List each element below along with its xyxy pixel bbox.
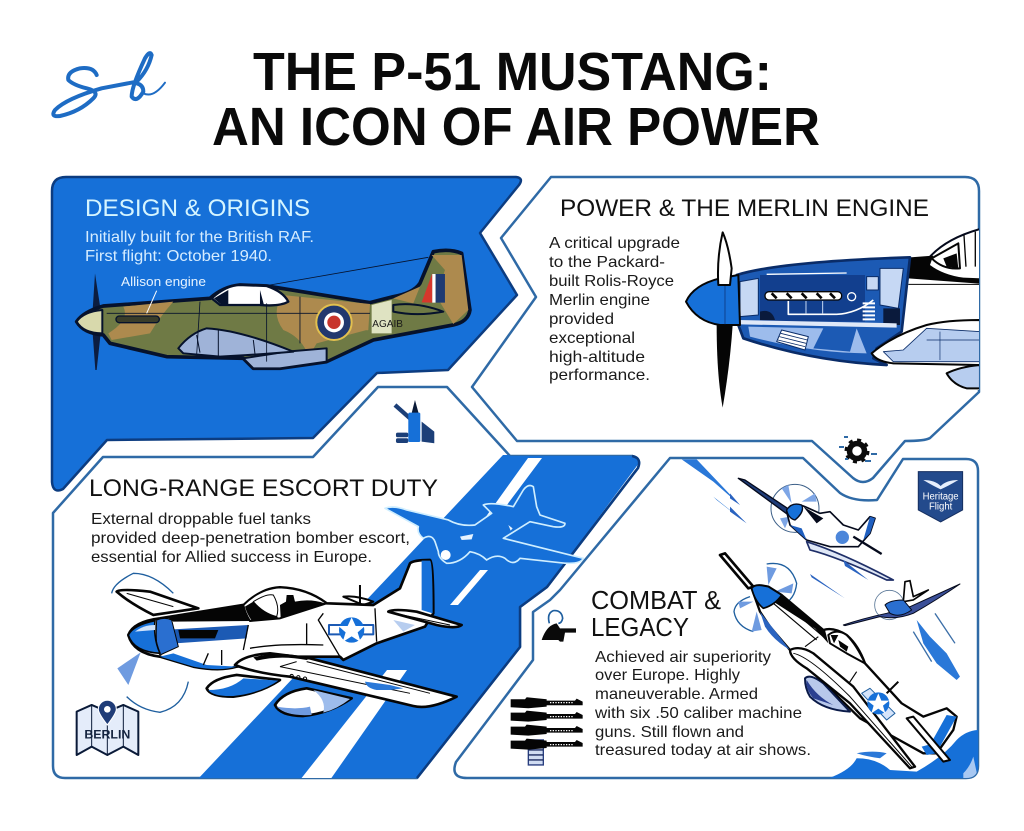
- text: origin facts: First flight: October 1940.: [85, 248, 272, 265]
- text: combat record: guns. Still flown and: [595, 724, 744, 741]
- text: combat record: maneuverable. Armed: [595, 686, 758, 703]
- heading: power and the Merlin engine: POWER & THE MERLIN ENGINE: [560, 195, 929, 222]
- icon: ammunition: [395, 400, 434, 443]
- badge: Heritage Flight: Heritage: [923, 491, 959, 502]
- clouds and streaks: [682, 459, 980, 782]
- text: combat record: over Europe. Highly: [595, 667, 740, 684]
- text: Merlin upgrade: high-altitude: [549, 349, 645, 366]
- text: origin facts: [85, 229, 314, 265]
- logo signature: [53, 53, 165, 116]
- illustration: diving Mustang in foreground: [720, 553, 957, 768]
- text: fuel tanks: [91, 511, 410, 566]
- text: Merlin upgrade: Merlin engine: [549, 292, 650, 309]
- label: Allison engine: Allison engine: [121, 274, 206, 289]
- icon: Berlin map: BERLIN: [84, 728, 130, 742]
- illustration: distant Mustang front view: [843, 581, 960, 626]
- text: origin facts: Initially built for the British RAF.: [85, 229, 314, 246]
- heading: combat and legacy: [591, 585, 721, 642]
- text: Merlin upgrade: performance.: [549, 367, 650, 384]
- text: fuel tanks: provided deep-penetration bomber escort,: [91, 530, 410, 547]
- title: AN ICON OF AIR POWER: [212, 97, 820, 157]
- text: Merlin upgrade: built Rolis-Royce: [549, 273, 674, 290]
- infographic canvas: [50, 51, 980, 780]
- illustration: RAF Mustang side view: [77, 250, 470, 370]
- illustration: bomber silhouette: [385, 486, 583, 563]
- panel: design and origins: [52, 177, 521, 490]
- text: Merlin upgrade: A critical upgrade: [549, 235, 680, 252]
- title: THE P-51 MUSTANG:: [253, 42, 772, 102]
- badge: Heritage Flight: [918, 472, 963, 522]
- illustration: upper Mustang: [738, 478, 893, 580]
- text: Merlin upgrade: [549, 235, 680, 384]
- icon: Berlin map: [77, 700, 138, 755]
- illustration: Merlin engine cutaway: [686, 229, 980, 408]
- panel: long-range escort duty: [53, 387, 645, 780]
- text: combat record: with six .50 caliber machine: [594, 705, 802, 722]
- heading: design and origins: DESIGN & ORIGINS: [85, 195, 310, 222]
- illustration: escort Mustang with drop tanks: [112, 560, 462, 716]
- text: fuel tanks: External droppable fuel tanks: [91, 511, 311, 528]
- text: Merlin upgrade: to the Packard-: [549, 254, 665, 271]
- icon: pilot at gun: [542, 611, 576, 642]
- text: Merlin upgrade: exceptional: [549, 330, 635, 347]
- text: combat record: Achieved air superiority: [595, 649, 771, 666]
- icon: machine guns: [511, 697, 583, 765]
- text: combat record: [594, 649, 811, 759]
- illustration: RAF Mustang side view: AGAIB: [372, 319, 403, 330]
- badge: Heritage Flight: Flight: [929, 501, 952, 512]
- heading: combat and legacy: COMBAT &: [591, 585, 721, 615]
- panel: power and the Merlin engine: [472, 177, 980, 482]
- text: combat record: treasured today at air shows.: [595, 742, 811, 759]
- panel: combat and legacy: [454, 458, 980, 782]
- icon: gear: [839, 437, 877, 462]
- text: Merlin upgrade: provided: [549, 311, 614, 328]
- runway background: [197, 455, 645, 780]
- heading: combat and legacy: LEGACY: [591, 612, 689, 642]
- text: fuel tanks: essential for Allied success in Europe.: [91, 549, 372, 566]
- title: [212, 42, 820, 157]
- illustration: far diving aircraft: [913, 613, 960, 680]
- heading: long-range escort duty: LONG-RANGE ESCORT DUTY: [89, 475, 438, 502]
